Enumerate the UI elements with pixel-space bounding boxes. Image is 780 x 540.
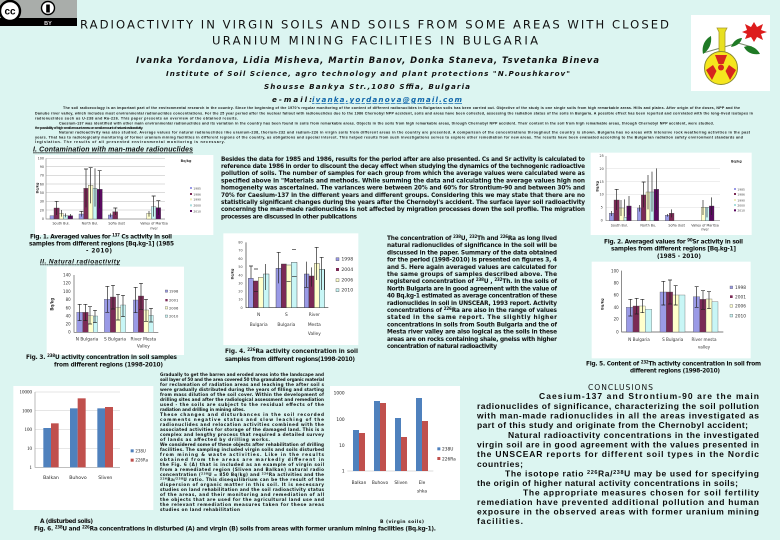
conclusions: with man-made radionuclides in all the areas investigated as — [476, 410, 759, 420]
legend: Fig 2: 2000 — [737, 203, 745, 207]
bar chart: Fig 1 Cs-137 activity — [35, 155, 213, 235]
bars: Fig 4 — [248, 262, 325, 308]
text block: disturbed soils small column: radiation and drilling in mining sites. — [160, 407, 245, 412]
caption: Fig 3: U activity concentration in soil samples — [55, 355, 178, 361]
text block: natural radioactivity discussion: stated in the same report. The slightly higher — [387, 315, 557, 321]
caption: Fig 5: 232 — [641, 360, 649, 364]
icon: CC BY licence badge — [0, 0, 77, 27]
text block: disturbed soils small column: of lands as affected by drilling works. — [160, 437, 270, 442]
legend: Fig 1: 2010 — [193, 209, 201, 213]
bar chart: Fig 6B virgin soils: Ele — [419, 480, 426, 486]
legend: Fig 6A — [131, 448, 149, 463]
legend: Fig 1: 1986 — [193, 192, 201, 196]
text block: natural radioactivity discussion: discussed in the paper. Summary of the data obtained — [387, 250, 557, 256]
text block: disturbed soils small column: concentration ( — [160, 472, 201, 477]
legend: Fig 6B: 226Ra — [442, 456, 456, 462]
text block: disturbed soils small column: 238 — [201, 472, 208, 476]
legend: Fig 1: 1985 — [193, 186, 201, 190]
bar chart: Fig 5 Th-232 concentration: 40 — [614, 305, 619, 310]
bar chart: Fig 1 Cs-137 activity: 70 — [40, 174, 44, 178]
text block: man-made radionuclides discussion: Besides the data for 1985 and 1986, results for the period after are also presented. Cs and Sr activity is calculated to — [221, 157, 585, 163]
text block: natural radioactivity discussion: radionuclides in soil in UNSCEAR, 1993 report. Activity — [387, 301, 557, 307]
caption: Fig 4: Fig. 4. — [225, 349, 245, 355]
text block: disturbed soils small column: of the areas, and their monitoring and remediation of all — [160, 492, 325, 497]
bar chart: Fig 6A disturbed soils — [13, 386, 153, 510]
bar chart: Fig 3 U-238 concentration: 140 — [63, 272, 71, 277]
caption: Fig 2 — [604, 238, 743, 260]
bar chart: Fig 5 Th-232 concentration: N Bulgaria — [628, 337, 650, 342]
text block: disturbed soils small column: for reclamation of radiation areas and leaching the after soil s — [160, 382, 324, 387]
title: URANIUM MINING FACILITIES IN BULGARIA — [212, 34, 538, 48]
bar chart: Fig 1 Cs-137 activity: river — [150, 226, 158, 230]
bars: Fig 3 — [77, 296, 153, 332]
text block: natural radioactivity discussion: concentrations of — [387, 308, 442, 314]
text block: disturbed soils small column: U ratio. This disequilibrium can be the result of the — [183, 477, 324, 482]
text block: disturbed soils small column: facilities. The sampling included virgin soils and soils disturbed — [160, 447, 324, 452]
bar chart: Fig 1 Cs-137 activity: Valley of Maritsa — [140, 222, 168, 226]
text block: disturbed soils small column: from a remediated region (Sliven and Balkan) natural radio — [160, 467, 324, 472]
text block: disturbed soils small column: soil layer of 50 and the area covered 50 t/ha granulated organic material — [160, 377, 325, 382]
legend: Fig 4 — [336, 257, 353, 294]
bars: Fig 5 — [626, 292, 718, 332]
bars: Fig 2 — [609, 189, 714, 221]
bar chart: Fig 6A disturbed soils: 100 — [25, 428, 32, 433]
conclusions: radionuclides of significance, characterizing the soil pollution — [477, 401, 759, 411]
conclusions: the UNSCEAR reports for different soil types in the Nordic — [477, 449, 759, 459]
bar chart: Fig 2 Sr-90 activity: 15 — [600, 180, 604, 184]
bar chart: Fig 3 U-238 concentration: River Mesta — [131, 337, 156, 343]
text block: disturbed soils small column: drilling sites and after the radiological assessment and remediation — [160, 397, 324, 402]
heading: section II: II. Natural radioactivity — [40, 258, 120, 266]
text block: man-made radionuclides discussion: reference date 1986 in order to discount the decay effect when studying the dynamics of the technogenic radioactive — [221, 164, 585, 170]
bars: Fig 6B — [353, 398, 428, 471]
authors and affiliation: Shousse Bankya Str.,1080 Sffia, Bulgaria — [264, 82, 470, 91]
caption: Fig 3: Fig. 3. — [26, 355, 45, 361]
bar chart: Fig 2 Sr-90 activity: river — [701, 228, 709, 232]
text block: natural radioactivity discussion: 226 — [500, 234, 508, 239]
authors and affiliation: ivanka.yordanova@gmail.com — [312, 95, 462, 104]
bars: Fig 1 — [50, 185, 161, 219]
text block: natural radioactivity discussion: U, — [461, 236, 469, 242]
conclusions: The appropriate measures chosen for soil fertility — [523, 488, 759, 498]
bar chart: Fig 3 U-238 concentration: 20 — [66, 322, 71, 327]
bar chart: Fig 2 Sr-90 activity: 10 — [600, 193, 604, 197]
text block: natural radioactivity discussion: areas are on rocks containing shale, gneiss with higher — [387, 337, 557, 343]
bar chart: Fig 2 Sr-90 activity: Bq/kg — [731, 159, 742, 163]
legend: Fig 2: 1986 — [737, 192, 745, 196]
text block: disturbed soils small column: the objects that are used for the agricultural land use and — [160, 497, 324, 502]
bar chart: Fig 6B virgin soils: Balkan — [352, 480, 367, 486]
abstract text block: Natural radioactivity was also studied. Average values for natural radionuclides like uranium-238, thorium-232 and radium-226 in virgin soils from different areas in the country are presented. A comparison of the concentrations throughout the country is shown. Bulgaria has no areas with intensive rock weathering activities in the past — [59, 130, 751, 134]
heading: conclusions: CONCLUSIONS — [588, 383, 653, 392]
text block: man-made radionuclides discussion: specified above in "Materials and methods. While summing the data and calculating the average values high non — [221, 178, 585, 184]
text block: disturbed soils small column: radionuclides and relocation activities combined with the — [160, 422, 324, 427]
text block: disturbed soils small column: dispersion of organic matter in this soil. It is necessary — [160, 482, 324, 487]
bar chart: Fig 2 Sr-90 activity: 5 — [601, 206, 603, 210]
text block: disturbed soils small column: 226 — [262, 472, 269, 476]
text block: disturbed soils small column: the relevant remediation measures taken for these areas — [160, 502, 324, 507]
text block: disturbed soils small column: These changes and disturbances in the soil recorded — [160, 412, 324, 417]
bar chart: Fig 1 Cs-137 activity: North Bul. — [82, 222, 98, 226]
text block: disturbed soils small column: studies on land rehabilitation — [160, 507, 240, 512]
caption: Fig 2: samples from different regions [Bq.kg-1] — [611, 246, 736, 252]
text block: disturbed soils small column: associated activities for storage of the damaged land. This is a — [160, 427, 324, 432]
text block: natural radioactivity discussion: and 5. Here again averaged values are calculated for — [387, 265, 557, 271]
text block: natural radioactivity discussion: The concentration of — [387, 236, 451, 242]
text block: man-made radionuclides discussion: concerning the man-made radionuclides is not affected by migration processes down the soil profile. The migration — [221, 207, 585, 213]
caption: Fig 5: different regions (1998-2010) — [630, 368, 720, 374]
caption: Fig 2: Sr activity in soil — [692, 240, 743, 246]
text block: man-made radionuclides discussion: statistically significant changes during the years after the Chernobyl's accident. The surface layer soil radioactivity — [221, 200, 585, 206]
bar chart: Fig 6A disturbed soils: 10 — [27, 447, 33, 452]
caption: Fig 4 — [225, 347, 358, 363]
caption: Fig 3 — [26, 353, 178, 368]
legend: Fig 5: 2006 — [735, 304, 746, 310]
bar chart: Fig 3 U-238 concentration: 0 — [68, 330, 71, 335]
legend: Fig 2: 1990 — [737, 198, 745, 202]
bar chart: Fig 6B virgin soils: shka — [417, 489, 427, 495]
abstract text block — [35, 106, 753, 144]
text block: natural radioactivity discussion: 238 — [453, 234, 461, 239]
bar chart: Fig 1 Cs-137 activity: 100 — [38, 156, 44, 160]
caption: Fig 6: Fig. 6. — [34, 526, 53, 532]
legend: Fig 6A: 226Ra — [135, 458, 149, 463]
text block: disturbed soils small column: Ra activities and the — [269, 472, 324, 477]
caption: Fig 6: B (virgin soils) — [380, 519, 424, 525]
bar chart: Fig 4 Ra-226 concentration: N — [257, 312, 260, 318]
text block: natural radioactivity discussion: Mesta river valley are also logical as the soils in these — [387, 330, 557, 336]
conclusions: U may be used for specifying — [624, 468, 759, 478]
text block: natural radioactivity discussion: registered concentration of — [387, 279, 474, 285]
conclusions: Ra/ — [598, 468, 613, 478]
bar chart: Fig 6A disturbed soils: 1000 — [22, 409, 33, 414]
bar chart: Fig 4 Ra-226 concentration — [223, 233, 358, 345]
text block: disturbed soils small column: obtained from the areas are markedly different in — [160, 457, 324, 462]
text block: disturbed soils small column: from mass dilution of the soil cover. Within the development of — [160, 392, 324, 397]
legend: Fig 5 — [730, 285, 746, 319]
caption: Fig 6: 226 — [82, 524, 90, 530]
title — [80, 18, 669, 48]
conclusions: countries; — [477, 459, 523, 469]
legend: Fig 3: 2010 — [169, 315, 179, 319]
text block: natural radioactivity discussion: 226 — [444, 306, 452, 311]
bar chart: Fig 1 Cs-137 activity: 90 — [40, 165, 44, 169]
bars: Fig 6A — [43, 398, 113, 467]
bar chart: Fig 2 Sr-90 activity: 0 — [601, 219, 603, 223]
bar chart: Fig 6A disturbed soils: Balkan — [43, 475, 59, 481]
conclusions: Caesium-137 and Strontium-90 are the main — [539, 391, 759, 401]
bar chart: Fig 4 Ra-226 concentration: 60 — [238, 257, 243, 261]
legend: Fig 3: 2006 — [169, 306, 179, 310]
legend: Fig 5: 2001 — [735, 294, 746, 300]
conclusions: part of this study and originate from the Chernobyl accident; — [477, 420, 748, 430]
bar chart: Fig 6A disturbed soils: 10000 — [20, 390, 32, 395]
text block: natural radioactivity discussion: 40 Bq.kg-1 estimated as average concentration of these — [387, 294, 557, 300]
authors and affiliation: Institute of Soil Science, agro technology and plant protections "N.Poushkarov" — [166, 69, 570, 78]
caption: Fig 6: A (disturbed soils) — [40, 519, 93, 525]
caption: Fig 1: Cs activity in soil — [120, 234, 172, 240]
conclusions: The isotope ratio — [505, 468, 583, 478]
text block: disturbed soils small column: used - the soils are subject to the residual effects of the — [160, 402, 324, 407]
text block: disturbed soils small column: 238 — [176, 476, 183, 480]
bar chart: Fig 1 Cs-137 activity: 30 — [40, 200, 44, 204]
authors and affiliation: Ivanka Yordanova, Lidia Misheva, Martin Banov, Donka Staneva, Tsvetanka Bineva — [136, 55, 599, 65]
legend: Fig 3: 2001 — [169, 299, 178, 303]
bar chart: Fig 1 Cs-137 activity: Sofia dust — [108, 222, 126, 226]
conclusions — [476, 383, 759, 526]
conclusions: the origin of higher natural activity concentrations in soils; — [477, 478, 738, 488]
legend: Fig 4: 2004 — [341, 267, 353, 273]
text block: disturbed soils small column: Ra/ — [167, 477, 176, 482]
bar chart: Fig 4 Ra-226 concentration: 30 — [238, 281, 243, 285]
bar chart: Fig 1 Cs-137 activity: 20 — [40, 208, 44, 212]
text block: natural radioactivity discussion: natural radionuclides of significance in the soil will be — [387, 243, 557, 249]
legend: Fig 6B: 238U — [442, 447, 453, 453]
bar chart: Fig 4 Ra-226 concentration: 50 — [238, 265, 243, 269]
legend: Fig 4: 2010 — [341, 288, 353, 294]
text block: disturbed soils small column — [160, 372, 325, 512]
caption: Fig 4: samples from different regions(1998-2010) — [225, 357, 355, 363]
bar chart: Fig 3 U-238 concentration — [47, 267, 184, 355]
text block: disturbed soils small column: from mining & waste activities. Like in the results — [160, 452, 325, 457]
legend: Fig 6A: 238U — [135, 448, 146, 453]
caption: Fig 2: 90 — [687, 238, 693, 242]
text block: disturbed soils small column: 226 — [160, 476, 167, 480]
legend: Fig 2 — [734, 187, 745, 213]
text block: disturbed soils small column: studies on land rehabilitation and the soil radioactivity status — [160, 487, 324, 492]
text block: natural radioactivity discussion: 232 — [469, 234, 477, 239]
bar chart: Fig 1 Cs-137 activity: South Bul. — [52, 222, 70, 226]
text block: disturbed soils small column: U = 850 Bq/kg) and — [208, 472, 261, 477]
bar chart: Fig 2 Sr-90 activity: Sofia dust — [668, 223, 686, 227]
legend: Fig 2: 2010 — [737, 209, 745, 213]
legend: Fig 3 — [165, 290, 179, 319]
bar chart: Fig 6B virgin soils — [330, 386, 460, 500]
bar chart: Fig 3 U-238 concentration: Valley — [137, 343, 150, 349]
conclusions: exposure in the observed areas with former uranium mining — [477, 506, 759, 516]
bar chart: Fig 5 Th-232 concentration: 20 — [614, 317, 619, 322]
bar chart: Fig 3 U-238 concentration: 80 — [66, 297, 71, 302]
caption: Fig 1 — [29, 232, 174, 254]
bar chart: Fig 4 Ra-226 concentration: 10 — [238, 298, 243, 302]
legend: Fig 5: 2010 — [735, 313, 746, 319]
bar chart: Fig 6A disturbed soils: Sliven — [98, 475, 112, 481]
caption: Fig 5: Th activity concentration in soil from — [648, 362, 761, 368]
authors and affiliation: e-mail: — [272, 95, 312, 104]
text block: man-made radionuclides discussion: homogeneity was ascertained. The variances were between 20% and 60% for Strontium-90 and between 30% and — [221, 186, 585, 192]
abstract text block: Caesium-137 was identified with other main environmental radionuclides and its variation in the country has been found in soils from remarkable areas. Objects in the soils from high remarkable areas, through Chernobyl NPP accident. Their content in the soil from high remarkable areas, through Chernobyl NPP accident, were studied. — [59, 122, 714, 126]
bar chart: Fig 2 Sr-90 activity: South Bul. — [611, 223, 628, 227]
bar chart: Fig 4 Ra-226 concentration: Bulgaria — [250, 322, 268, 328]
caption: Fig 2: (1985 - 2010) — [657, 254, 701, 260]
bar chart: Fig 1 Cs-137 activity: 0 — [42, 217, 44, 221]
icon: CC BY licence badge: BY — [44, 21, 52, 27]
bar chart: Fig 4 Ra-226 concentration: 70 — [238, 249, 243, 253]
text block: natural radioactivity discussion: Ra are also in the range of values — [452, 308, 558, 314]
bar chart: Fig 4 Ra-226 concentration: 0 — [241, 306, 243, 310]
bar chart: Fig 4 Ra-226 concentration: Valley — [308, 331, 321, 337]
caption: Fig 4: 226 — [247, 347, 256, 352]
icon: flask with radiation symbol and flower — [691, 15, 770, 91]
caption: Fig 1: samples from different regions [Bq.kg-1] (1985 — [29, 242, 174, 248]
caption: Fig 2: Fig. 2. Averaged values for — [604, 240, 686, 246]
bar chart: Fig 4 Ra-226 concentration: 20 — [238, 290, 243, 294]
legend: Fig 4: 1998 — [341, 257, 353, 263]
caption: Fig 6: U and — [62, 526, 82, 532]
bar chart: Fig 3 U-238 concentration: 120 — [63, 281, 71, 286]
bar chart: Fig 5 Th-232 concentration: 100 — [611, 268, 619, 273]
bar chart: Fig 5 Th-232 concentration: 0 — [616, 329, 619, 334]
bar chart: Fig 2 Sr-90 activity: Valley of Maritsa — [691, 223, 719, 227]
bar chart: Fig 2 Sr-90 activity: 20 — [600, 167, 604, 171]
conclusions: remediation have prevented additional pollution and human — [477, 497, 759, 507]
bar chart: Fig 4 Ra-226 concentration: 40 — [238, 273, 243, 277]
text block: natural radioactivity discussion: for the period (1998-2010) is presented on figures 3, 4 — [387, 258, 557, 264]
legend: Fig 6B — [437, 447, 456, 462]
bar chart: Fig 5 Th-232 concentration: valley — [698, 344, 711, 349]
text block: natural radioactivity discussion: the same groups of samples described above. The — [387, 272, 557, 278]
conclusions: virgin soil are in good agreement with the values presented in — [477, 440, 759, 450]
text block: disturbed soils small column: Gradually to get the barren and eroded areas into the landscape and — [160, 372, 324, 377]
legend: Fig 1: 1990 — [193, 198, 201, 202]
bar chart: Fig 6A disturbed soils: 1 — [29, 466, 32, 471]
text block: natural radioactivity discussion: North Bulgaria are in good agreement with the value of — [387, 286, 557, 292]
bar chart: Fig 6B virgin soils: 1000 — [334, 390, 345, 396]
bar chart: Fig 3 U-238 concentration: 100 — [63, 289, 71, 294]
bar chart: Fig 6B virgin soils: 1 — [342, 469, 345, 475]
bar chart: Fig 6B virgin soils: 10 — [339, 443, 345, 449]
bar chart: Fig 1 Cs-137 activity: 60 — [40, 182, 44, 186]
caption: Fig 6 — [34, 519, 436, 532]
abstract text block: the possibility of high small amount areas on small amount of natural radioactivity. — [35, 126, 143, 130]
title: RADIOACTIVITY IN VIRGIN SOILS AND SOILS FROM SOME AREAS WITH CLOSED — [80, 18, 669, 32]
bar chart: Fig 3 U-238 concentration: S Bulgaria — [104, 337, 126, 343]
bar chart: Fig 3 U-238 concentration: 40 — [66, 313, 71, 318]
text block: man-made radionuclides discussion: pollution of soils. The number of samples for each group from which the average values were calculated were as — [221, 171, 586, 177]
text block: natural radioactivity discussion: 232 — [494, 277, 503, 282]
bar chart: Fig 5 Th-232 concentration: 80 — [614, 280, 619, 285]
text block: man-made radionuclides discussion: processes are discussed in other publications — [221, 214, 358, 220]
text block: natural radioactivity discussion: U , — [484, 279, 494, 285]
icon: CC BY licence badge: cc — [4, 6, 16, 18]
bar chart: Fig 3 U-238 concentration: Bq/kg — [49, 298, 54, 311]
abstract text block: The soil radioecology is an important part of the environmental research in the country. Since the beginning of the 1970's regular monitoring of the content of different radionuclides in Bulgarian soils has been carried out. Objective of the study is one single soils from high remarkable areas. Hills and plains. After origin of the doses, NPP and the — [63, 106, 740, 110]
bar chart: Fig 5 Th-232 concentration — [592, 262, 751, 358]
text block: disturbed soils small column: were gradually distributed during the years of filling and starting — [160, 387, 324, 392]
caption: Fig 1: - 2010) — [86, 248, 112, 254]
authors and affiliation — [136, 55, 599, 104]
bar chart: Fig 1 Cs-137 activity: 50 — [40, 191, 44, 195]
bar chart: Fig 6A disturbed soils: Buhovo — [69, 475, 87, 481]
conclusions: 226 — [587, 470, 597, 476]
caption: Fig 6: 238 — [55, 524, 63, 530]
text block: natural radioactivity discussion: concentrations in soils from South Bulgaria and the of — [387, 322, 557, 328]
legend: Fig 1 — [190, 186, 201, 213]
legend: Fig 3: 1998 — [169, 290, 179, 294]
conclusions: facilities. — [477, 516, 523, 526]
bar chart: Fig 5 Th-232 concentration: 60 — [614, 293, 619, 298]
bar chart: Fig 4 Ra-226 concentration: S — [285, 312, 288, 318]
text block: natural radioactivity discussion: Ra as long lived — [508, 236, 557, 242]
legend: Fig 4: 2006 — [341, 278, 353, 284]
text block: natural radioactivity discussion: Th. in the soils of — [502, 279, 557, 285]
text block: natural radioactivity discussion: concentration of natural radioactivity — [387, 344, 497, 350]
caption: Fig 4: Ra activity concentration in soil — [255, 349, 358, 355]
legend: Fig 5: 1998 — [735, 285, 746, 291]
caption: Fig 5 — [586, 360, 761, 374]
bar chart: Fig 1 Cs-137 activity: Bq/kg — [181, 159, 192, 163]
bar chart: Fig 4 Ra-226 concentration: Bulgaria — [277, 322, 296, 328]
abstract text block: Danube river valley, which includes most environmental radionuclides concentrations. For the 25 year period after the nuclear fallout with radionuclides due to the 1986 Chernobyl NPP accident, soils and areas have been collected, assessing the radiation status of the soils in Bulgaria. A possible effect has been reported and correlated with the long-lived isotopes in — [35, 112, 753, 116]
bar chart: Fig 5 Th-232 concentration: River mesta — [691, 337, 717, 342]
bar chart: Fig 4 Ra-226 concentration: Mesta — [308, 322, 321, 328]
bar chart: Fig 4 Ra-226 concentration: 80 — [238, 241, 243, 245]
bar chart: Fig 4 Ra-226 concentration: River — [309, 312, 320, 318]
bar chart: Fig 2 Sr-90 activity: North Bu. — [640, 223, 656, 227]
caption: Fig 3: from different regions (1998-2010) — [54, 362, 163, 368]
bar chart: Fig 3 U-238 concentration: 60 — [66, 305, 71, 310]
text block: disturbed soils small column: comments negative status and slow leaching of the — [160, 417, 324, 422]
caption: Fig 1: 137 — [112, 232, 120, 238]
abstract text block: legislation. The results of all presented environmental monitoring is necessary. — [35, 140, 225, 144]
heading: section I: I. Contamination with man-made radionuclides — [33, 146, 193, 154]
bar chart: Fig 5 Th-232 concentration: S Bulgaria — [662, 337, 684, 342]
caption: Fig 5: Fig. 5. Content of — [586, 362, 639, 368]
text block: natural radioactivity discussion: Th and — [477, 236, 500, 242]
bar chart: Fig 3 U-238 concentration: N Bulgaria — [76, 337, 99, 343]
conclusions: Natural radioactivity concentrations in the investigated — [508, 430, 759, 440]
text block: natural radioactivity discussion: 238 — [476, 277, 484, 282]
abstract text block: years. That has to radiologically monitoring of former uranium mining facilities in different regions of the country, as obligations and special interest. This helped results from such investigations serves to explore other remediation for new areas. The results have been evaluated according to the Bulgarian radiation safety environment standards and — [35, 136, 743, 140]
conclusions: 238 — [613, 470, 624, 476]
abstract text block: radionuclides such as U-238 and Ra-226. This paper presents an overview of the obtained results. — [35, 116, 238, 120]
caption: Fig 3: 238 — [47, 353, 55, 358]
bar chart: Fig 1 Cs-137 activity: Bq/kg — [36, 182, 40, 193]
bar chart: Fig 6B virgin soils: 100 — [336, 417, 345, 423]
bar chart: Fig 2 Sr-90 activity — [591, 153, 752, 235]
bar chart: Fig 2 Sr-90 activity: Bq/kg — [595, 180, 599, 192]
text block: natural radioactivity discussion — [387, 234, 558, 350]
caption: Fig 1: Fig. 1. Averaged values for — [30, 234, 111, 240]
text block: disturbed soils small column: the Fig. 6 (A) that is included as an example of virgin soil — [160, 462, 325, 467]
bar chart: Fig 6B virgin soils: Sliven — [394, 480, 408, 486]
legend: Fig 2: 1985 — [737, 187, 745, 191]
bar chart: Fig 2 Sr-90 activity: 25 — [600, 154, 604, 158]
caption: Fig 6: Ra concentrations in disturbed (A) and virgin (B) soils from areas with former uranium mining facilities (Bq.kg-1). — [90, 526, 436, 532]
text block: disturbed soils small column: complex and lengthy process that required a detailed survey — [160, 432, 324, 437]
bar chart: Fig 6B virgin soils: Buhovo — [372, 480, 388, 486]
text block: man-made radionuclides discussion — [221, 157, 586, 220]
bar chart: Fig 5 Th-232 concentration: Bq/kg — [601, 298, 605, 310]
legend: Fig 1: 2000 — [193, 204, 201, 208]
text block: man-made radionuclides discussion: 70% for Caesium-137 in the different years and different groups. Considering this we may state that there are no — [221, 193, 585, 199]
text block: disturbed soils small column: We considered some of these objects after rehabilitation of drilling — [160, 442, 324, 447]
bar chart: Fig 4 Ra-226 concentration: Bq/kg — [230, 268, 234, 279]
